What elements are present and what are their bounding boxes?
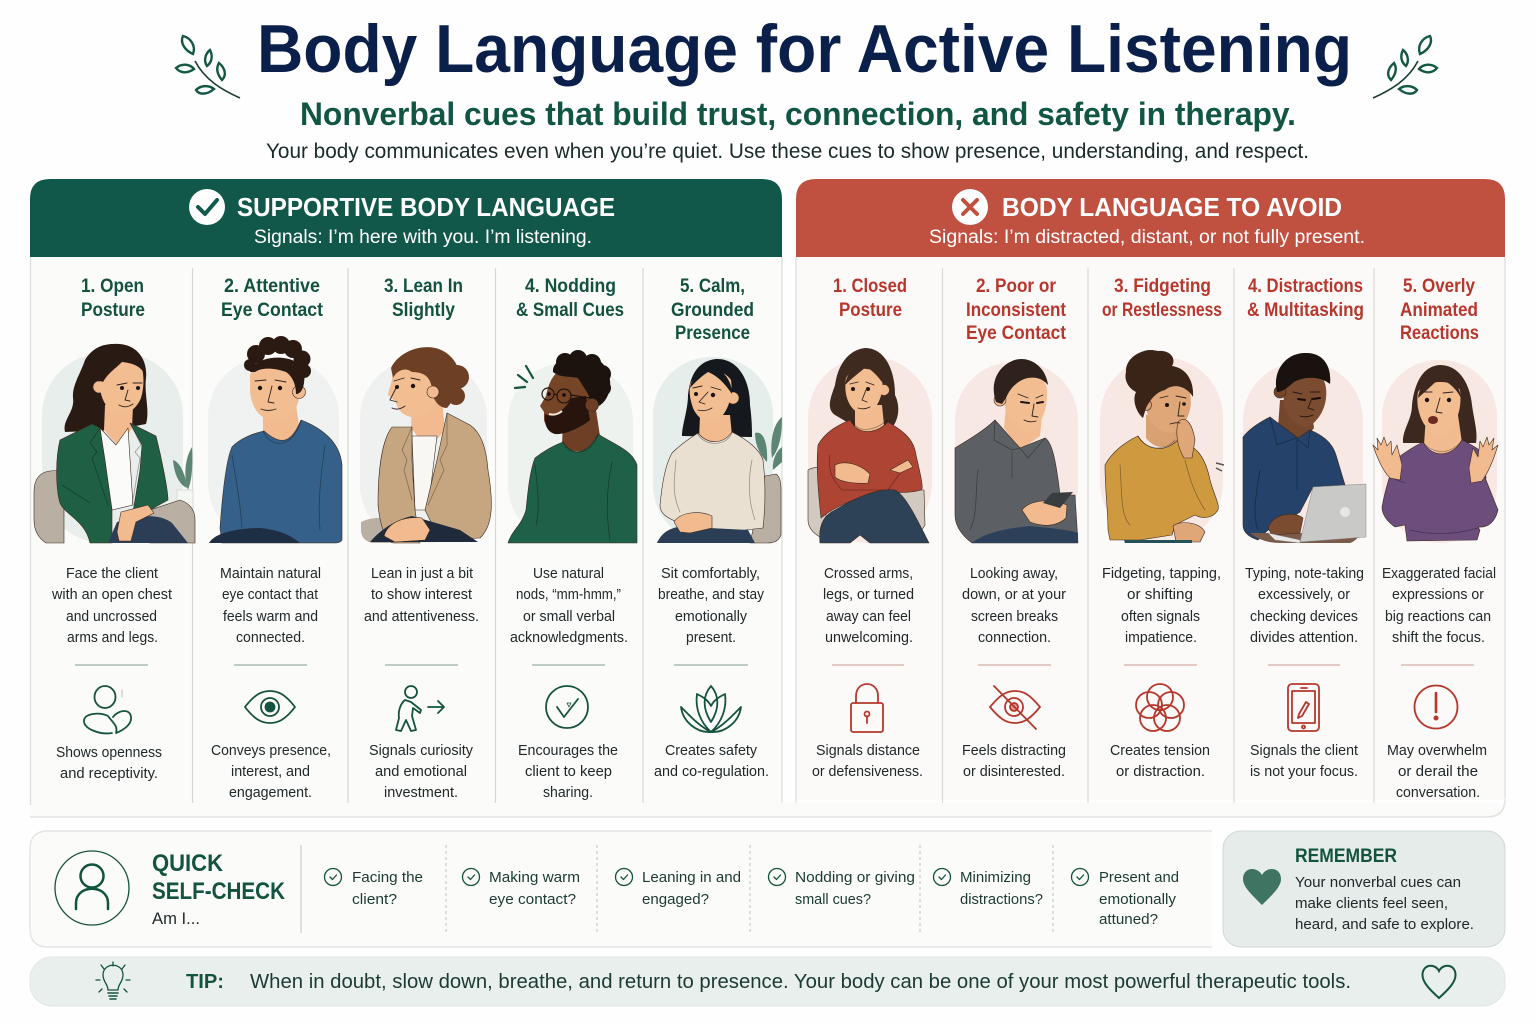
panel: quick self-check	[30, 831, 1212, 947]
description: connection.	[978, 630, 1051, 646]
remember text	[1295, 874, 1474, 933]
supportive signal line: Signals: I’m here with you. I’m listening.	[254, 227, 592, 248]
description: Maintain natural	[220, 566, 321, 582]
panel: remember callout	[1223, 831, 1505, 947]
effect caption: Shows openness	[56, 745, 162, 761]
description: Looking away,	[970, 566, 1058, 582]
figure: man looking at phone	[955, 359, 1078, 543]
check item: distractions: distractions?	[960, 891, 1043, 908]
remember text: make clients feel seen,	[1295, 895, 1448, 912]
figure: woman fidgeting in yellow sweater	[1100, 350, 1224, 543]
description: excessively, or	[1258, 587, 1350, 603]
description	[220, 566, 321, 646]
description: Fidgeting, tapping,	[1102, 566, 1221, 582]
check item: facing	[324, 868, 423, 908]
check item: attuned: Present and	[1099, 869, 1179, 886]
description	[364, 566, 479, 625]
column: closed posture	[808, 276, 932, 780]
avoid signal line: Signals: I’m distracted, distant, or not fully present.	[929, 227, 1365, 248]
column title	[1400, 276, 1479, 344]
icon: leaning figure with arrow	[396, 686, 444, 731]
panel: body language to avoid	[796, 179, 1505, 803]
description: checking devices	[1250, 609, 1358, 625]
column: poor eye contact	[955, 276, 1078, 780]
effect caption: engagement.	[229, 785, 312, 801]
description: divides attention.	[1250, 630, 1358, 646]
column title: 2. Poor or	[976, 276, 1057, 297]
figure: woman with crossed arms	[808, 348, 932, 543]
column title: 5. Overly	[1403, 276, 1475, 297]
column title	[833, 276, 907, 321]
effect caption: investment.	[384, 785, 458, 801]
description: Lean in just a bit	[371, 566, 473, 582]
effect caption: Signals the client	[1250, 743, 1358, 759]
panel: tip banner	[30, 957, 1505, 1006]
panel: supportive body language	[30, 179, 782, 805]
check item: nodding: small cues?	[795, 891, 871, 908]
column title: & Small Cues	[516, 300, 624, 321]
intro sentence: Your body communicates even when you’re quiet. Use these cues to show presence, understanding, and respect.	[266, 140, 1309, 163]
description: down, or at your	[962, 587, 1066, 603]
description	[510, 566, 628, 646]
effect caption: Signals curiosity	[369, 743, 474, 759]
self-check lead: Am I...	[152, 910, 200, 928]
description: emotionally	[675, 609, 748, 625]
effect caption: Creates safety	[665, 743, 758, 759]
description: connected.	[236, 630, 305, 646]
column title: 4. Nodding	[525, 276, 616, 297]
check item: nodding: Nodding or giving	[795, 869, 915, 886]
check item: facing: Facing the	[352, 869, 423, 886]
figure: man in blue sweater	[208, 336, 342, 543]
remember heading: REMEMBER	[1295, 845, 1397, 867]
column title: or Restlessness	[1102, 300, 1222, 321]
column title: Eye Contact	[221, 300, 324, 321]
description	[1245, 566, 1364, 646]
description: often signals	[1121, 609, 1200, 625]
title: Body Language for Active Listening	[257, 11, 1352, 87]
effect caption: Conveys presence,	[211, 743, 331, 759]
panel header: supportive	[30, 179, 782, 257]
icon: lotus	[681, 686, 741, 732]
column: fidgeting or restlessness	[1100, 276, 1224, 780]
icon: tangled flower	[1136, 684, 1184, 731]
supportive heading: SUPPORTIVE BODY LANGUAGE	[237, 192, 615, 222]
description	[51, 566, 172, 646]
column title	[1102, 276, 1222, 321]
column title: Grounded	[671, 300, 754, 321]
description: Typing, note-taking	[1245, 566, 1364, 582]
effect caption	[369, 743, 474, 801]
icon: smartphone	[1288, 684, 1319, 731]
effect caption: client to keep	[525, 764, 612, 780]
effect caption	[1110, 743, 1210, 780]
figure: woman in green blazer	[34, 344, 195, 543]
column title: Presence	[675, 323, 750, 344]
description: away can feel	[826, 609, 911, 625]
description: expressions or	[1392, 587, 1484, 603]
column title	[221, 276, 324, 321]
column title	[966, 276, 1067, 344]
description: Crossed arms,	[824, 566, 913, 582]
figure: man with glasses in green sweater	[508, 350, 637, 543]
column title	[516, 276, 624, 321]
column title	[671, 276, 754, 344]
effect caption: Creates tension	[1110, 743, 1210, 759]
column title	[1247, 276, 1364, 321]
description	[1382, 566, 1496, 646]
description	[823, 566, 914, 646]
icon: check badge	[189, 189, 225, 225]
column title	[81, 276, 145, 321]
description: with an open chest	[51, 587, 172, 603]
column: nodding and small cues	[508, 276, 637, 801]
check item: leaning: Leaning in and	[642, 869, 741, 886]
figure: woman in tan cardigan	[360, 347, 491, 543]
effect caption	[518, 743, 618, 801]
check item: attuned: attuned?	[1099, 911, 1158, 928]
icon: person in circle	[55, 851, 129, 925]
effect caption: Signals distance	[816, 743, 920, 759]
self-check heading	[152, 850, 286, 905]
effect caption	[1387, 743, 1487, 801]
effect caption: and co-regulation.	[654, 764, 769, 780]
icon: x badge	[952, 189, 988, 225]
icon: left leaf sprig	[176, 36, 240, 98]
effect caption	[962, 743, 1066, 780]
description: or shifting	[1127, 587, 1193, 603]
effect caption: is not your focus.	[1250, 764, 1358, 780]
effect caption	[211, 743, 331, 801]
figure: man typing on laptop	[1243, 353, 1366, 543]
column title: Reactions	[1400, 323, 1479, 344]
icon: eye	[245, 691, 295, 723]
effect caption	[1250, 743, 1358, 780]
description: shift the focus.	[1392, 630, 1485, 646]
description: big reactions can	[1385, 609, 1491, 625]
check item: eye contact: Making warm	[489, 869, 580, 886]
check item: attuned	[1072, 868, 1179, 928]
remember text: Your nonverbal cues can	[1295, 874, 1461, 891]
effect caption: or defensiveness.	[812, 764, 923, 780]
description	[962, 566, 1066, 646]
column title: Animated	[1400, 300, 1478, 321]
description: unwelcoming.	[825, 630, 913, 646]
column: calm grounded presence	[653, 276, 782, 780]
effect caption	[56, 745, 162, 782]
description	[658, 566, 765, 646]
self-check heading: SELF-CHECK	[152, 878, 286, 905]
column title: Slightly	[392, 300, 455, 321]
icon: heart outline	[1422, 966, 1456, 998]
tip label: TIP:	[186, 970, 224, 993]
check item: eye contact: eye contact?	[489, 891, 576, 908]
column title: Posture	[839, 300, 902, 321]
figure: woman with raised hands	[1373, 360, 1498, 543]
description: and attentiveness.	[364, 609, 479, 625]
description	[1102, 566, 1221, 646]
description: nods, “mm-hmm,”	[516, 587, 621, 603]
effect caption: conversation.	[1396, 785, 1480, 801]
column: overly animated reactions	[1373, 276, 1498, 801]
icon: solid heart	[1243, 869, 1281, 905]
effect caption: and receptivity.	[60, 766, 158, 782]
effect caption: Encourages the	[518, 743, 618, 759]
subtitle: Nonverbal cues that build trust, connection, and safety in therapy.	[300, 96, 1296, 132]
effect caption	[812, 743, 923, 780]
check item: distractions	[934, 868, 1043, 908]
description: present.	[686, 630, 736, 646]
effect caption: May overwhelm	[1387, 743, 1487, 759]
description: and uncrossed	[66, 609, 157, 625]
remember text: heard, and safe to explore.	[1295, 916, 1474, 933]
column title: Eye Contact	[966, 323, 1067, 344]
column: distractions and multitasking	[1243, 276, 1366, 780]
effect caption: or distraction.	[1116, 764, 1205, 780]
effect caption: or disinterested.	[963, 764, 1065, 780]
column title: 1. Open	[81, 276, 144, 297]
column: attentive eye contact	[208, 276, 342, 801]
check item: leaning	[616, 868, 741, 908]
icon: circle check	[546, 686, 588, 728]
icon: right leaf sprig	[1373, 36, 1437, 98]
effect caption	[654, 743, 769, 780]
effect caption: Feels distracting	[962, 743, 1066, 759]
check item: attuned: emotionally	[1099, 891, 1177, 908]
description: screen breaks	[971, 609, 1058, 625]
description: or small verbal	[523, 609, 615, 625]
icon: padlock	[851, 684, 883, 732]
description: arms and legs.	[67, 630, 158, 646]
icon: light bulb	[96, 962, 130, 999]
icon: slashed eye	[990, 686, 1040, 729]
description: acknowledgments.	[510, 630, 628, 646]
effect caption: interest, and	[231, 764, 310, 780]
check item: facing: client?	[352, 891, 397, 908]
column title: Posture	[81, 300, 145, 321]
column title: 3. Lean In	[384, 276, 463, 297]
column title: 1. Closed	[833, 276, 907, 297]
check item: distractions: Minimizing	[960, 869, 1031, 886]
column title: 3. Fidgeting	[1114, 276, 1211, 297]
column title	[384, 276, 463, 321]
check item: nodding	[768, 868, 915, 908]
description: feels warm and	[223, 609, 318, 625]
column title: 5. Calm,	[680, 276, 745, 297]
column title: 2. Attentive	[224, 276, 320, 297]
column: open posture	[34, 276, 195, 782]
column: lean in slightly	[360, 276, 491, 801]
description: legs, or turned	[823, 587, 914, 603]
check item: leaning: engaged?	[642, 891, 709, 908]
description: Exaggerated facial	[1382, 566, 1496, 582]
icon: alert circle	[1414, 686, 1458, 728]
description: breathe, and stay	[658, 587, 765, 603]
description: Sit comfortably,	[661, 566, 760, 582]
effect caption: and emotional	[375, 764, 467, 780]
description: eye contact that	[222, 587, 318, 603]
avoid heading: BODY LANGUAGE TO AVOID	[1002, 192, 1342, 222]
icon: person with heart	[84, 686, 131, 733]
effect caption: sharing.	[543, 785, 593, 801]
column title: 4. Distractions	[1248, 276, 1363, 297]
check item: eye contact	[462, 868, 580, 908]
self-check heading: QUICK	[152, 850, 224, 877]
column title: & Multitasking	[1247, 300, 1364, 321]
description: impatience.	[1125, 630, 1197, 646]
description: to show interest	[371, 587, 472, 603]
effect caption: or derail the	[1398, 764, 1478, 780]
description: Use natural	[533, 566, 604, 582]
description: Face the client	[66, 566, 158, 582]
panel header: avoid	[796, 179, 1505, 257]
figure: woman in cream sweater	[653, 357, 782, 543]
tip text: When in doubt, slow down, breathe, and return to presence. Your body can be one of your most powerful therapeutic tools.	[250, 970, 1351, 993]
column title: Inconsistent	[966, 300, 1067, 321]
